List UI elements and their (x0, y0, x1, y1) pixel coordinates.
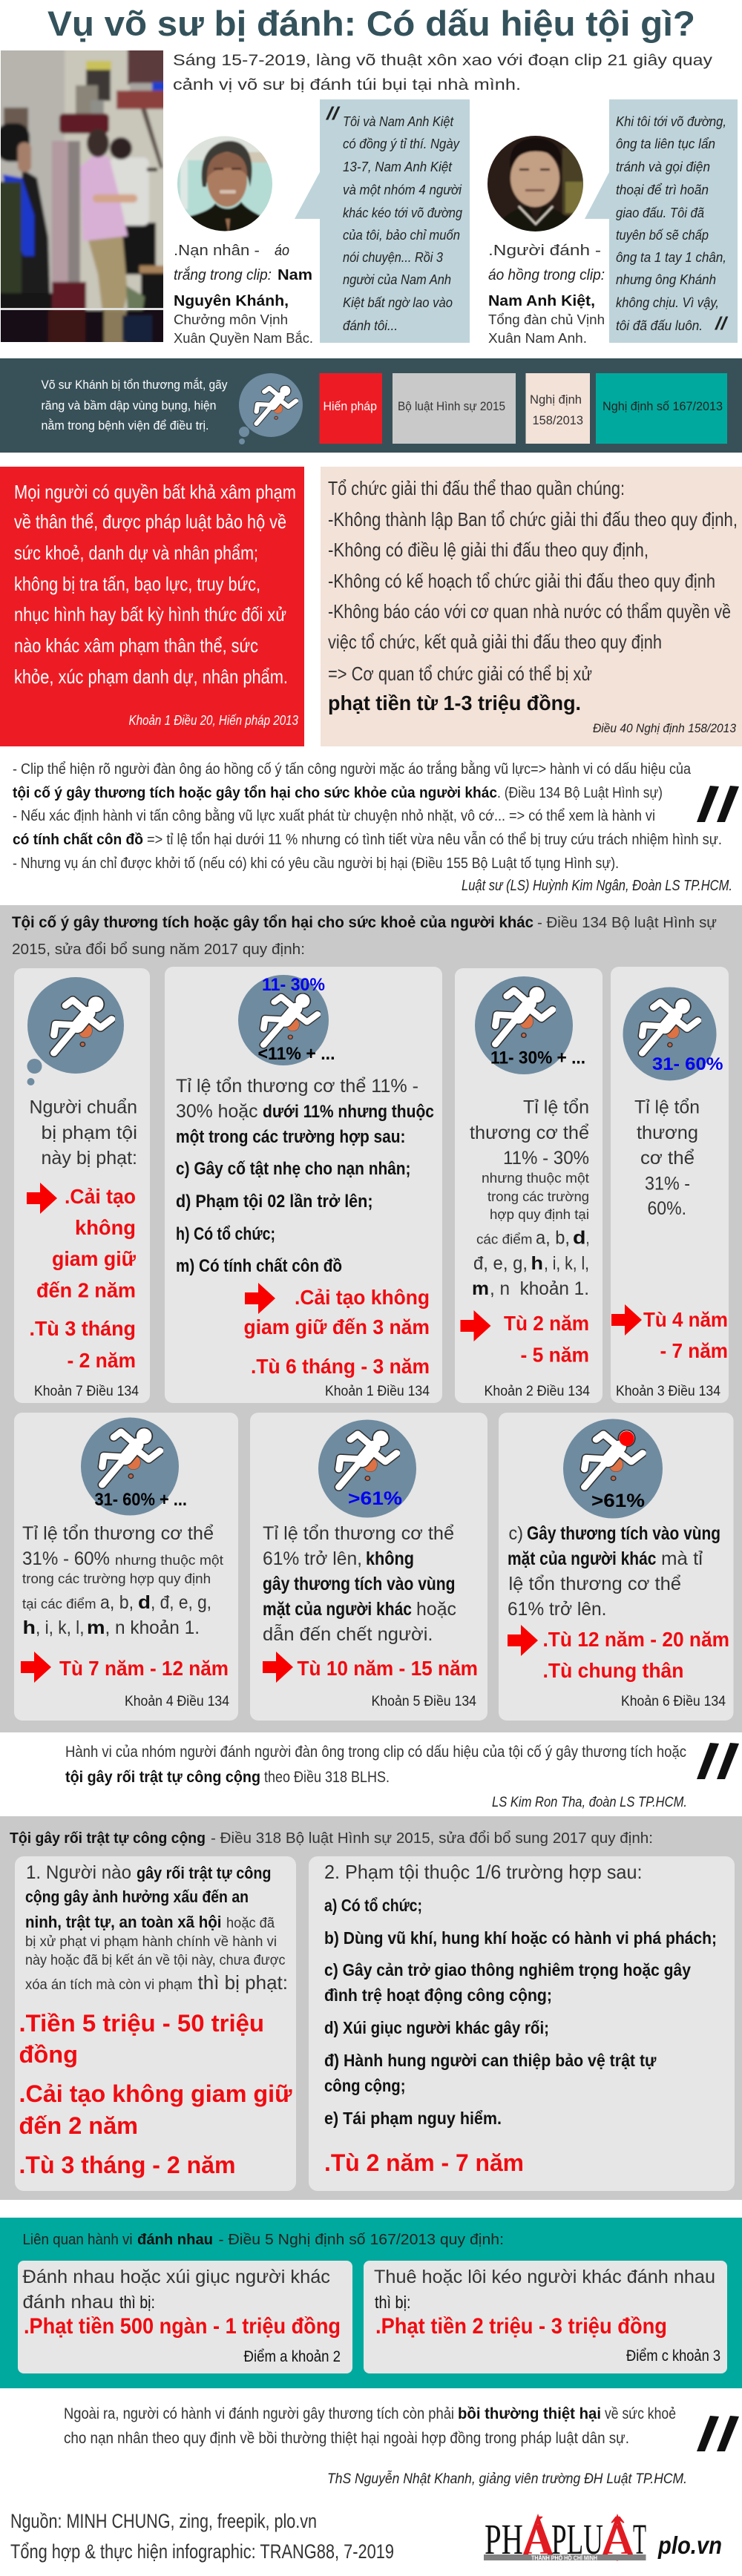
panel: decree 158/2013 (cream): phạt tiền từ 1-3 triệu đồng. (328, 691, 581, 714)
card: clause 1: .Tù 3 tháng - 2 năm (19, 2152, 236, 2178)
heading: Decree 167: đánh nhau (137, 2232, 213, 2248)
speech bubble: victim quote: khác kéo tới võ đường (343, 206, 462, 220)
card: Khoản 6: mặt của người khác (508, 1548, 657, 1569)
panel: constitution (red): về thân thể, được pháp luật bảo hộ về (14, 510, 286, 533)
card: Khoản 7: không (75, 1216, 136, 1239)
box: Nghị định số 167/2013: Nghị định số 167/2013 (603, 399, 723, 413)
heading: Article 134: 2015, sửa đổi bổ sung năm 2017 quy định: (12, 942, 305, 958)
card: fighting (18, 2261, 352, 2373)
caption: victim: Xuân Quyền Nam Bắc. (174, 330, 313, 346)
portrait: victim (177, 137, 272, 231)
card: hiring others to fight (364, 2261, 727, 2373)
card: Khoản 5: Tù 10 năm - 15 năm (297, 1657, 478, 1680)
icon: quote mark (697, 786, 739, 822)
speech bubble: victim quote: người của Nam Anh (343, 272, 451, 287)
speech bubble: victim quote: và một nhóm 4 người (343, 183, 462, 197)
card: clause 2: công cộng; (324, 2076, 405, 2095)
speech bubble: attacker quote: tuyên bố sẽ chấp (616, 228, 709, 243)
card: Khoản 4: a, b, (100, 1592, 134, 1613)
heading: Article 318: - Điều 318 Bộ luật Hình sự 2015, sửa đổi bổ sung 2017 quy định: (211, 1830, 653, 1847)
card: Khoản 2: - 5 năm (521, 1343, 589, 1367)
heading: Article 134: - Điều 134 Bộ luật Hình sự (537, 915, 717, 931)
card: Khoản 4: tại các điểm (22, 1597, 96, 1611)
lawyer comment: Kim Ron Tha: tội gây rối trật tự công cộng (65, 1769, 260, 1786)
card: Khoản 2: hợp quy định tại (490, 1207, 589, 1222)
icon: runner in thought bubble (239, 373, 303, 444)
icon: runner with 31-60%: 31- 60% (652, 1054, 723, 1074)
lawyer comment: Huỳnh Kim Ngân: - Nhưng vụ án chỉ được khởi tố (nếu có) khi có yêu cầu người bị hại (Điều 155 Bộ Luật tố tụng Hình sự). (13, 855, 619, 872)
injury summary text (42, 378, 228, 433)
icon: runner with 31-60% (623, 987, 723, 1080)
card: clause 2: đ) Hành hung người can thiệp bảo vệ trật tự (324, 2051, 657, 2070)
card: Khoản 2: Khoản 2 Điều 134 (484, 1384, 590, 1399)
panel: decree 158/2013 (cream) (321, 467, 742, 746)
speech bubble: attacker quote: thoại để trì hoãn (616, 183, 709, 197)
heading: Article 318 (10, 1830, 653, 1847)
card: clause 1: này hoặc đã bị kết án về tội này, chưa được (25, 1953, 285, 1968)
card: Khoản 4: , i, k, l, (36, 1617, 85, 1638)
heading: Article 318: Tội gây rối trật tự công cộng (10, 1830, 206, 1847)
card: Khoản 5: gây thương tích vào vùng (263, 1574, 456, 1594)
speech bubble: victim quote: đánh tôi... (343, 318, 398, 333)
card: clause 2: e) Tái phạm nguy hiểm. (324, 2109, 502, 2128)
icon: runner (27, 977, 124, 1085)
card: clause 2: .Tù 2 năm - 7 năm (324, 2149, 524, 2176)
card: fighting: Đánh nhau hoặc xúi giục người khác (22, 2267, 330, 2287)
card: Khoản 3: Tù 4 năm (643, 1308, 728, 1331)
speech bubble: victim quote (295, 99, 470, 343)
card: Khoản 4: , đ, e, g, (151, 1592, 211, 1613)
lawyer comment: Huỳnh Kim Ngân (13, 760, 732, 894)
card: Khoản 7: - 2 năm (67, 1349, 136, 1372)
card: Khoản 6: c) (509, 1523, 523, 1544)
box: Bộ luật Hình sự 2015 (393, 373, 516, 444)
panel: constitution (red): Mọi người có quyền bất khả xâm phạm (14, 481, 296, 503)
card: Khoản 2: nhưng thuộc một (482, 1171, 589, 1186)
card: Khoản 4: d (138, 1592, 151, 1613)
panel: constitution (red): Khoản 1 Điều 20, Hiến pháp 2013 (129, 713, 298, 728)
card: fighting: đánh nhau (22, 2292, 114, 2313)
card: clause 2: a) Có tổ chức; (324, 1896, 422, 1915)
card: Khoản 7: này bị phạt: (42, 1148, 137, 1169)
card: clause 2: c) Gây cản trở giao thông nghiêm trọng hoặc gây (324, 1960, 691, 1979)
card: Khoản 4: Khoản 4 Điều 134 (125, 1694, 229, 1709)
card: clause 1: gây rối trật tự công (137, 1864, 272, 1882)
logo: Pháp Luật plo.vn (484, 2514, 722, 2563)
logo: Pháp Luật plo.vn: THÀNH PHỐ HỒ CHÍ MINH (531, 2554, 597, 2561)
card: Khoản 2: các điểm (476, 1232, 533, 1246)
speech bubble: attacker quote: tránh và gọi điện (616, 160, 710, 174)
icon: runner with red head and over 61% (563, 1419, 663, 1518)
panel: decree 158/2013 (cream): -Không có điều lệ giải thi đấu theo quy định, (328, 539, 649, 561)
card: Khoản 2: trong các trường (487, 1189, 589, 1204)
icon: runner with 11-30% and under 11%: <11% + ... (258, 1044, 335, 1064)
card: Khoản 2: Tù 2 năm (504, 1312, 589, 1335)
injury summary text: Võ sư Khánh bị tổn thương mắt, gãy (42, 378, 228, 392)
speech bubble: victim quote: Kiệt bất ngờ lao vào (343, 295, 453, 310)
card: Khoản 3 (611, 967, 729, 1403)
card: Khoản 3: thương (637, 1123, 698, 1143)
card: Khoản 7: .Tù 3 tháng (30, 1317, 136, 1340)
card: Khoản 5: 61% trở lên, (263, 1548, 362, 1569)
caption: victim: Nam (278, 267, 312, 283)
injury summary text: nằm trong bệnh viện để điều trị. (42, 418, 209, 433)
speech bubble: attacker quote: tôi đã đấu luôn. (616, 318, 703, 333)
card: Khoản 4: Tù 7 năm - 12 năm (59, 1657, 229, 1680)
card: Khoản 1: c) Gây cố tật nhẹ cho nạn nhân; (176, 1159, 411, 1179)
arrow (263, 1652, 293, 1683)
card: clause 1: .Tiền 5 triệu - 50 triệu (19, 2010, 264, 2037)
panel: decree 158/2013 (cream): Tổ chức giải thi đấu thể thao quần chúng: (328, 477, 625, 499)
panel: constitution (red): khỏe, xúc phạm danh dự, nhân phẩm. (14, 666, 288, 688)
card: Khoản 4: trong các trường hợp quy định (22, 1571, 211, 1586)
expert comment: Nguyễn Nhật Khanh: ThS Nguyễn Nhật Khanh, giảng viên trường ĐH Luật TP.HCM. (327, 2471, 687, 2487)
card: clause 1: đồng (19, 2041, 78, 2068)
card: clause 2: b) Dùng vũ khí, hung khí hoặc có hành vi phá phách; (324, 1928, 717, 1948)
card: Khoản 2: 11% - 30% (503, 1148, 589, 1169)
card: Khoản 7: Khoản 7 Điều 134 (34, 1384, 139, 1399)
logo: Pháp Luật plo.vn: PLU (551, 2515, 603, 2563)
speech bubble: attacker quote: ông ta liên tục lẩn (616, 137, 715, 151)
card: Khoản 2: , i, k, l, (544, 1253, 589, 1274)
box: Hiến pháp: Hiến pháp (324, 399, 377, 413)
card: clause 1: xóa án tích mà còn vi phạm (25, 1977, 193, 1993)
card: Khoản 6: 61% trở lên. (508, 1599, 607, 1620)
caption: attacker: Tổng đàn chủ Vịnh (488, 312, 605, 327)
panel: Article 134 (0, 905, 742, 1732)
icon: runner with 11-30% and under 11%: 11- 30% (262, 975, 325, 995)
title: Vụ võ sư bị đánh: Có dấu hiệu tội gì? (47, 4, 695, 43)
card: Khoản 4: , n khoản 1. (105, 1617, 200, 1638)
speech bubble: attacker quote: // (715, 314, 729, 334)
card: Khoản 5: dẫn đến chết người. (263, 1623, 433, 1645)
box: Nghị định 158/2013 (525, 373, 590, 444)
expert comment: Nguyễn Nhật Khanh: về sức khoẻ (605, 2405, 676, 2422)
card: Khoản 1: .Tù 6 tháng - 3 năm (251, 1355, 430, 1378)
card: Khoản 6: .Tù chung thân (543, 1659, 684, 1682)
icon: runner with 11-30% plus (475, 976, 585, 1074)
caption: victim: Chưởng môn Vịnh (174, 312, 288, 327)
arrow (245, 1283, 275, 1314)
expert comment: Nguyễn Nhật Khanh: bồi thường thiệt hại (458, 2405, 601, 2422)
arrow (460, 1310, 491, 1341)
icon: quote mark (697, 2416, 739, 2451)
caption: victim: Nguyên Khánh, (174, 293, 289, 309)
panel: constitution (red): nhục hình hay bất kỳ hình thức đối xử (14, 603, 286, 625)
lawyer comment: Huỳnh Kim Ngân: có tính chất côn đồ (13, 832, 143, 848)
caption: victim: áo (275, 243, 289, 259)
card: Khoản 3: 31% - (645, 1174, 690, 1195)
card: hiring others to fight: Điểm c khoản 3 (626, 2347, 720, 2365)
card: Khoản 1: Khoản 1 Điều 134 (325, 1384, 430, 1399)
speech bubble: victim quote: có đồng ý tỉ thí. Ngày (343, 137, 460, 151)
card: Khoản 4: nhưng thuộc một (115, 1553, 223, 1568)
panel: Decree 167/2013 (teal) (0, 2218, 742, 2388)
heading: Article 134: Tội cố ý gây thương tích hoặc gây tổn hại cho sức khoẻ của người khác (12, 914, 533, 931)
speech bubble: attacker quote: ông ta 1 tay 1 chân, (616, 250, 726, 265)
card: Khoản 1: .Cải tạo không (295, 1286, 430, 1309)
caption: victim: .Nạn nhân - (174, 243, 264, 259)
card: Khoản 2: Tỉ lệ tổn (523, 1097, 589, 1117)
panel: Article 318 (0, 1816, 742, 2200)
speech bubble: attacker quote: không chịu. Vì vậy, (616, 295, 719, 310)
card: Khoản 4: h (22, 1617, 36, 1638)
card: clause 1: 1. Người nào (26, 1862, 131, 1883)
panel: decree 158/2013 (cream): => Cơ quan tổ chức giải có thể bị xử (328, 663, 592, 685)
card: Khoản 7: giam giữ (52, 1247, 137, 1270)
icon: quote mark (697, 1743, 739, 1779)
speech bubble: attacker quote: Khi tôi tới võ đường, (616, 114, 726, 129)
speech bubble: attacker quote: giao đấu. Tôi đã (616, 206, 704, 220)
card: clause 1: ninh, trật tự, an toàn xã hội (25, 1913, 221, 1931)
caption: victim (174, 243, 313, 346)
intro text: Sáng 15-7-2019, làng võ thuật xôn xao với đoạn clip 21 giây quay (173, 52, 713, 69)
card: Khoản 6: .Tù 12 năm - 20 năm (543, 1628, 729, 1651)
arrow (508, 1625, 538, 1656)
icon: runner with 31-60% plus: 31- 60% + ... (95, 1490, 187, 1510)
logo: Pháp Luật plo.vn: Ậ (603, 2515, 633, 2563)
panel: constitution (red): không bị tra tấn, bạo lực, truy bức, (14, 573, 260, 595)
card: Khoản 7: bị phạm tội (42, 1123, 137, 1143)
card: Khoản 4: m (87, 1617, 105, 1638)
speech bubble: victim quote: của tôi, bảo chỉ muốn (343, 228, 460, 243)
logo: Pháp Luật plo.vn: plo.vn (657, 2531, 722, 2559)
card: Khoản 1: h) Có tổ chức; (176, 1224, 275, 1244)
card: Khoản 1: một trong các trường hợp sau: (176, 1127, 405, 1147)
lawyer comment: Kim Ron Tha: LS Kim Ron Tha, đoàn LS TP.HCM. (492, 1795, 687, 1810)
speech bubble: victim quote: nói chuyện... Rồi 3 (343, 250, 443, 265)
card: Khoản 5: Tỉ lệ tổn thương cơ thể (263, 1523, 454, 1544)
card: Khoản 5 (250, 1413, 487, 1721)
panel: constitution (red) (0, 467, 304, 746)
heading: Decree 167 (22, 2232, 504, 2248)
heading: Article 134 (12, 914, 717, 958)
speech bubble: attacker quote: nhưng ông Khánh (616, 272, 716, 287)
card: Khoản 2: thương cơ thể (470, 1123, 589, 1143)
box: Bộ luật Hình sự 2015: Bộ luật Hình sự 2015 (398, 399, 505, 413)
card: clause 1: .Cải tạo không giam giữ (19, 2080, 292, 2107)
speech bubble: victim quote: Tôi và Nam Anh Kiệt (343, 114, 454, 129)
intro text: cảnh vị võ sư bị đánh túi bụi tại nhà mình. (173, 76, 521, 93)
injury summary text: răng và bầm dập vùng bụng, hiện (42, 398, 217, 413)
card: clause 2: 2. Phạm tội thuộc 1/6 trường hợp sau: (324, 1861, 643, 1883)
heading: Decree 167: - Điều 5 Nghị định số 167/2013 quy định: (218, 2232, 504, 2248)
card: Khoản 2: a, b, (536, 1227, 570, 1248)
source credits: Nguồn: MINH CHUNG, zing, freepik, plo.vn (10, 2510, 317, 2532)
card: clause 1: bị xử phạt vi phạm hành chính về hành vi (25, 1934, 277, 1950)
card: Khoản 2: h (531, 1253, 543, 1274)
arrow (611, 1304, 642, 1335)
panel: decree 158/2013 (cream): việc tổ chức, kết quả giải thi đấu theo quy định (328, 631, 662, 653)
box: Nghị định 158/2013: Nghị định (530, 392, 582, 407)
lawyer comment: Huỳnh Kim Ngân: tội cố ý gây thương tích hoặc gây tổn hại cho sức khỏe của người khác (13, 785, 497, 801)
card: Khoản 3: Tỉ lệ tổn (634, 1097, 700, 1117)
expert comment: Nguyễn Nhật Khanh: Ngoài ra, người có hành vi đánh người gây thương tích còn phải (64, 2405, 454, 2422)
caption: attacker: Nam Anh Kiệt, (488, 293, 595, 309)
lawyer comment: Kim Ron Tha (65, 1744, 687, 1810)
card: Khoản 1: dưới 11% nhưng thuộc (263, 1102, 434, 1122)
icon: runner with over 61%: >61% (348, 1488, 402, 1509)
card: fighting: .Phạt tiền 500 ngàn - 1 triệu đồng (24, 2314, 341, 2339)
card: clause 1: thì bị phạt: (197, 1971, 288, 1994)
card: Khoản 2: đ, e, g, (473, 1253, 528, 1274)
card: hiring others to fight: Thuê hoặc lôi kéo người khác đánh nhau (374, 2267, 715, 2287)
card: Khoản 1: giam giữ đến 3 năm (243, 1315, 430, 1338)
source credits: Tổng hợp & thực hiện infographic: TRANG88, 7-2019 (10, 2540, 394, 2563)
card: Khoản 4 (14, 1413, 238, 1721)
icon: runner with 31-60% plus (81, 1417, 187, 1515)
card: Khoản 1: 30% hoặc (176, 1101, 258, 1122)
logo: Pháp Luật plo.vn: Á (523, 2515, 551, 2563)
card: Khoản 4: 31% - 60% (22, 1548, 110, 1569)
box: Nghị định 158/2013: 158/2013 (533, 413, 583, 427)
card: Khoản 2: d (573, 1227, 586, 1248)
panel: constitution (red): nào khác xâm phạm thân thể, sức (14, 634, 258, 657)
lawyer comment: Kim Ron Tha: theo Điều 318 BLHS. (264, 1769, 390, 1786)
card: clause 2: d) Xúi giục người khác gây rối; (324, 2018, 549, 2037)
card: clause 1: hoặc đã (226, 1916, 275, 1931)
photo: still from the clip (0, 45, 168, 347)
box: Hiến pháp (319, 373, 382, 444)
card: Khoản 5: không (366, 1548, 414, 1569)
card: Khoản 2: , n khoản 1. (490, 1278, 589, 1299)
card: Khoản 6: lệ tổn thương cơ thể (509, 1574, 681, 1594)
card: Khoản 7: .Cải tạo (65, 1185, 136, 1208)
caption: attacker: .Người đánh - (488, 243, 601, 259)
expert comment: Nguyễn Nhật Khanh: cho nạn nhân theo quy định về bồi thường thiệt hại ngoài hợp đồng trong pháp luật dân sự. (64, 2430, 629, 2447)
card: clause 1: đến 2 năm (19, 2112, 138, 2139)
caption: victim: trắng trong clip: (174, 266, 272, 283)
card: Khoản 2 (455, 968, 603, 1403)
card: Khoản 1 (165, 967, 442, 1403)
card: Khoản 6: mà tỉ (661, 1548, 703, 1569)
lawyer comment: Huỳnh Kim Ngân: - Nếu xác định hành vi tấn công bằng vũ lực xuất phát từ chuyện nhỏ nhặt, vô cớ... => có thể xem là hành vi (13, 807, 655, 824)
card: Khoản 5: Khoản 5 Điều 134 (371, 1694, 476, 1709)
card: fighting: Điểm a khoản 2 (243, 2348, 341, 2365)
card: clause 2: đình trệ hoạt động công cộng; (324, 1985, 552, 2005)
logo: Pháp Luật plo.vn: PH (485, 2515, 523, 2563)
card: fighting: thì bị: (119, 2293, 155, 2312)
card: Khoản 5: hoặc (416, 1599, 456, 1620)
speech bubble: victim quote: // (326, 104, 341, 124)
card: Khoản 6: Khoản 6 Điều 134 (621, 1694, 726, 1709)
source credits (10, 2510, 394, 2563)
portrait: attacker (487, 136, 583, 231)
card: Khoản 2: , (586, 1227, 589, 1248)
speech bubble: attacker quote (585, 99, 738, 343)
card: Khoản 1: m) Có tính chất côn đồ (176, 1256, 342, 1276)
intro text (173, 52, 713, 93)
card: clause 1 (15, 1856, 296, 2191)
card: clause 1: cộng gây ảnh hưởng xấu đến an (25, 1887, 249, 1906)
icon: runner with red head and over 61%: >61% (591, 1491, 645, 1511)
box: Nghị định số 167/2013 (596, 373, 727, 444)
speech bubble: victim quote: 13-7, Nam Anh Kiệt (343, 160, 453, 174)
arrow (27, 1183, 57, 1214)
card: Khoản 1: Tỉ lệ tổn thương cơ thể 11% - (176, 1076, 418, 1097)
card: Khoản 7 (14, 968, 150, 1403)
dark band: injuries and legal sources (0, 358, 742, 453)
caption: attacker: Xuân Nam Anh. (488, 331, 587, 346)
card: Khoản 7: Người chuẩn (30, 1097, 137, 1117)
icon: runner with over 61% (318, 1420, 416, 1518)
card: hiring others to fight: .Phạt tiền 2 triệu - 3 triệu đồng (375, 2314, 667, 2339)
card: Khoản 3: - 7 năm (660, 1339, 728, 1362)
icon: runner with 11-30% and under 11% (238, 975, 335, 1065)
card: Khoản 3: cơ thể (640, 1148, 695, 1169)
card: clause 2 (309, 1856, 735, 2191)
card: Khoản 1: d) Phạm tội 02 lần trở lên; (176, 1192, 372, 1212)
card: Khoản 6 (499, 1413, 733, 1721)
expert comment: Nguyễn Nhật Khanh (64, 2405, 687, 2487)
card: Khoản 7: đến 2 năm (36, 1279, 136, 1301)
card: hiring others to fight: thì bị: (375, 2293, 411, 2312)
panel: constitution (red): sức khoẻ, danh dự và nhân phẩm; (14, 542, 258, 564)
caption: attacker: áo hồng trong clip: (488, 267, 605, 283)
card: Khoản 4: Tỉ lệ tổn thương cơ thể (22, 1523, 214, 1544)
icon: runner with 11-30% plus: 11- 30% + ... (490, 1048, 585, 1068)
card: Khoản 5: mặt của người khác (263, 1599, 412, 1620)
heading: Decree 167: Liên quan hành vi (22, 2232, 132, 2248)
arrow (21, 1652, 51, 1683)
card: Khoản 2: m (472, 1278, 489, 1299)
lawyer comment: Huỳnh Kim Ngân: . (Điều 134 Bộ Luật Hình sự) (497, 785, 663, 801)
card: Khoản 3: 60%. (647, 1198, 686, 1219)
card: Khoản 3: Khoản 3 Điều 134 (616, 1384, 720, 1399)
caption: attacker (488, 243, 605, 346)
logo: Pháp Luật plo.vn: T (633, 2515, 646, 2563)
